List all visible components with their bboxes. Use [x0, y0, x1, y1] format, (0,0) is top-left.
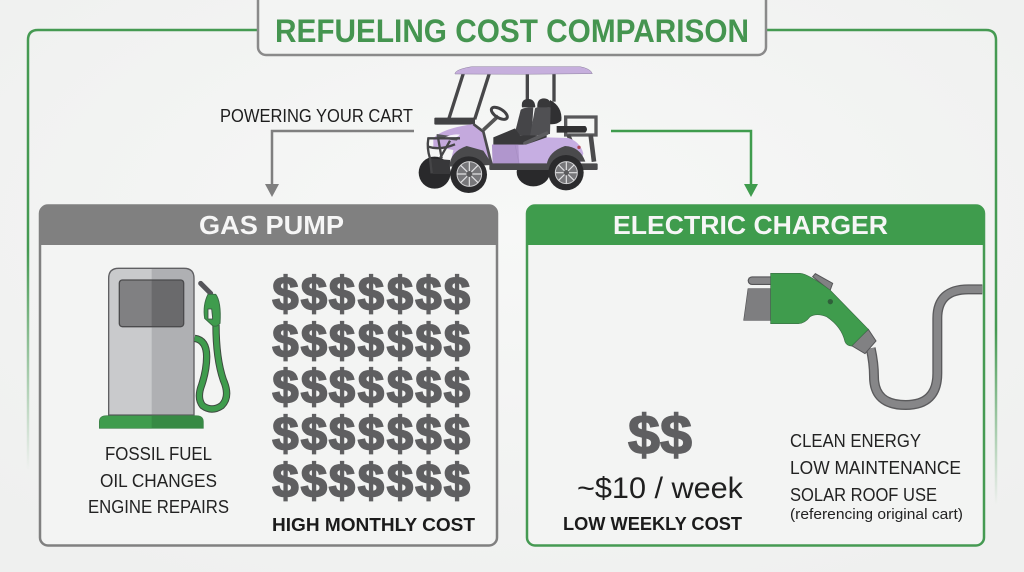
dollar sign grid: $ — [387, 267, 413, 320]
dollar sign grid: $ — [272, 267, 299, 320]
panel: electric charger — [527, 205, 984, 546]
icon: golf cart — [419, 67, 598, 193]
dollar sign grid: $ — [272, 314, 299, 367]
icon: fuel pump — [99, 268, 227, 428]
dollar sign grid: $ — [415, 454, 442, 507]
dollar sign grid: $ — [415, 267, 442, 320]
dollar sign grid: $ — [329, 360, 355, 413]
dollar sign grid: $ — [301, 454, 327, 507]
roof posts — [449, 73, 554, 119]
steering wheel — [483, 116, 498, 130]
label: low weekly cost: LOW WEEKLY COST — [563, 513, 743, 534]
rear basket — [566, 117, 596, 135]
title: REFUELING COST COMPARISON — [275, 13, 749, 49]
dollar sign grid: $ — [358, 360, 384, 413]
outer frame — [28, 30, 996, 505]
fenders — [449, 146, 493, 167]
dollar sign grid: $ — [358, 314, 384, 367]
arrow: to electric charger — [611, 131, 758, 197]
dollar sign grid: $ — [301, 407, 327, 460]
dollar sign grid: $ — [415, 360, 442, 413]
arrow: to gas pump — [265, 131, 414, 197]
dollar sign grid: $ — [444, 267, 470, 320]
panel header: gas pump — [40, 205, 497, 245]
dollar sign grid: $ — [387, 360, 413, 413]
dollar sign grid: $ — [444, 454, 470, 507]
list: electric benefits: SOLAR ROOF USE — [790, 485, 937, 505]
front wheel — [450, 156, 487, 193]
dash — [434, 118, 475, 125]
dollar sign grid: $ — [387, 454, 413, 507]
rear wheel — [548, 155, 584, 190]
panel: gas pump — [40, 205, 497, 546]
dollar sign grid: $ — [329, 314, 355, 367]
dollar sign grid: $ — [301, 267, 327, 320]
list: electric benefits: CLEAN ENERGY — [790, 431, 921, 451]
dollar sign grid: $ — [358, 454, 384, 507]
front grille — [430, 158, 450, 174]
body: rear and side panel — [492, 137, 583, 165]
icon: charging plug — [744, 273, 982, 405]
dollar sign grid: $ — [272, 454, 299, 507]
list: electric benefits: (referencing original cart) — [790, 506, 963, 523]
dollar sign grid: $ — [329, 454, 355, 507]
dollar sign grid: $ — [415, 314, 442, 367]
dollar sign grid: $ — [272, 407, 299, 460]
dollar sign grid: $ — [358, 267, 384, 320]
dollar sign grid: $ — [415, 407, 442, 460]
list: gas pump drawbacks: ENGINE REPAIRS — [88, 497, 229, 517]
list: gas pump drawbacks: OIL CHANGES — [100, 471, 217, 491]
body: hood — [433, 124, 491, 165]
big dollar signs: $$ — [628, 403, 692, 466]
seats — [548, 100, 561, 124]
dollar sign grid: $ — [329, 267, 355, 320]
far wheels — [419, 157, 451, 189]
dollar sign grid: $ — [444, 407, 470, 460]
list: electric benefits: LOW MAINTENANCE — [790, 458, 961, 478]
dollar sign grid: $ — [301, 314, 327, 367]
dollar sign grid: $ — [387, 314, 413, 367]
label: powering your cart: POWERING YOUR CART — [220, 106, 413, 126]
label: high monthly cost: HIGH MONTHLY COST — [272, 514, 476, 535]
dollar sign grid: $ — [444, 360, 470, 413]
panel header: electric charger: ELECTRIC CHARGER — [613, 210, 888, 240]
dollar sign grid — [272, 267, 470, 507]
list: gas pump drawbacks — [88, 444, 229, 517]
roof — [455, 67, 592, 74]
panel header: electric charger — [527, 205, 984, 245]
dollar sign grid: $ — [358, 407, 384, 460]
title — [258, 0, 766, 55]
dollar sign grid: $ — [301, 360, 327, 413]
list: gas pump drawbacks: FOSSIL FUEL — [105, 444, 212, 464]
dollar sign grid: $ — [329, 407, 355, 460]
weekly cost value: ~$10 / week — [577, 472, 744, 505]
dollar sign grid: $ — [272, 360, 299, 413]
dollar sign grid: $ — [444, 314, 470, 367]
panel header: gas pump: GAS PUMP — [199, 210, 344, 240]
list: electric benefits — [790, 431, 963, 523]
dollar sign grid: $ — [387, 407, 413, 460]
